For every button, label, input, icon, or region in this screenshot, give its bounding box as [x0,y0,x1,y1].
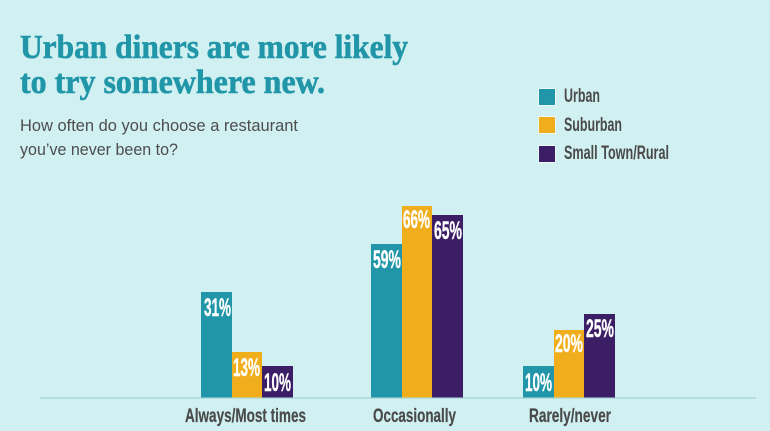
bar: small town 65% [432,215,463,398]
bar: urban 10%: 10% [525,369,552,397]
bar: urban 31%: 31% [204,294,231,322]
group: occasionally [371,206,463,427]
category label: Occasionally [373,406,456,427]
group: rarely/never [523,314,615,427]
title [20,29,408,101]
bar: urban 59%: 59% [373,246,401,274]
bar: suburban 20%: 20% [555,330,583,358]
bar: small town 10%: 10% [264,369,291,397]
category label: Rarely/never [529,406,611,427]
axis baseline [40,397,756,399]
bar: urban 59% [371,244,402,398]
legend item: small town/rural: Small Town/Rural [564,143,669,164]
bar: suburban 66%: 66% [403,206,430,234]
bar: small town 65%: 65% [434,217,462,245]
category label: Always/Most times [185,406,306,427]
bar: suburban 66% [402,206,432,398]
legend [538,86,669,164]
legend item: urban: Urban [564,86,600,107]
group: always/most times [185,292,306,427]
title: to try somewhere new. [20,64,325,101]
bar: small town 25%: 25% [586,315,614,343]
title: Urban diners are more likely [20,29,408,66]
subtitle question: you’ve never been to? [20,140,178,159]
subtitle question [20,116,298,159]
subtitle question: How often do you choose a restaurant [20,116,298,135]
bar chart [40,206,756,427]
bar: suburban 13%: 13% [233,354,260,382]
legend item: suburban: Suburban [564,115,622,136]
